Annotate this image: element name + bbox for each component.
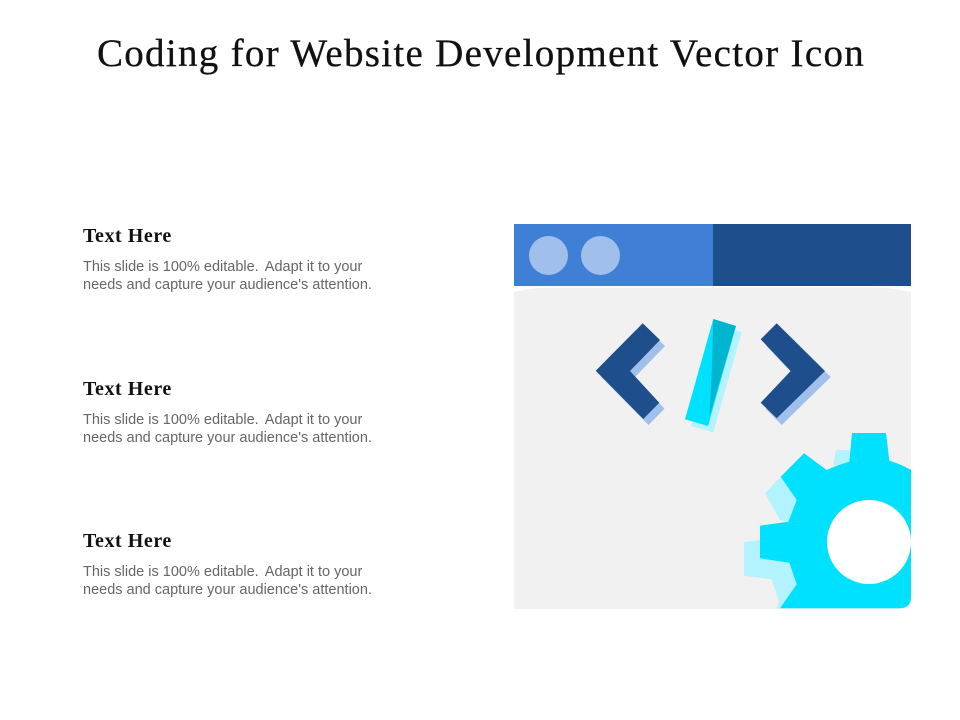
icon: gear shadow: [744, 450, 849, 608]
heading 1: Text Here: [83, 225, 172, 247]
icon: browser window: [514, 224, 911, 609]
browser header bar: [514, 224, 911, 286]
body text 2: [83, 412, 372, 446]
icon: slash: [685, 319, 742, 432]
body text 3: needs and capture your audience's attention.: [83, 582, 372, 598]
window buttons: [529, 236, 620, 275]
icon: gear: [760, 433, 911, 608]
heading 2: Text Here: [83, 378, 172, 400]
body text 3: This slide is 100% editable. Adapt it to your: [83, 564, 362, 580]
title: Coding for Website Development Vector Icon: [97, 32, 865, 75]
icon: right chevron: [761, 323, 831, 425]
icon: left chevron: [596, 323, 665, 425]
body text 2: needs and capture your audience's attention.: [83, 430, 372, 446]
body text 1: This slide is 100% editable. Adapt it to your: [83, 259, 362, 275]
gear hole: [827, 500, 911, 584]
body text 1: needs and capture your audience's attention.: [83, 277, 372, 293]
browser content panel: [514, 288, 911, 609]
body text 3: [83, 564, 372, 598]
body text 1: [83, 259, 372, 293]
text block 2: [83, 378, 372, 446]
heading 3: Text Here: [83, 530, 172, 552]
text block 3: [83, 530, 372, 598]
body text 2: This slide is 100% editable. Adapt it to your: [83, 412, 362, 428]
text block 1: [83, 225, 372, 293]
